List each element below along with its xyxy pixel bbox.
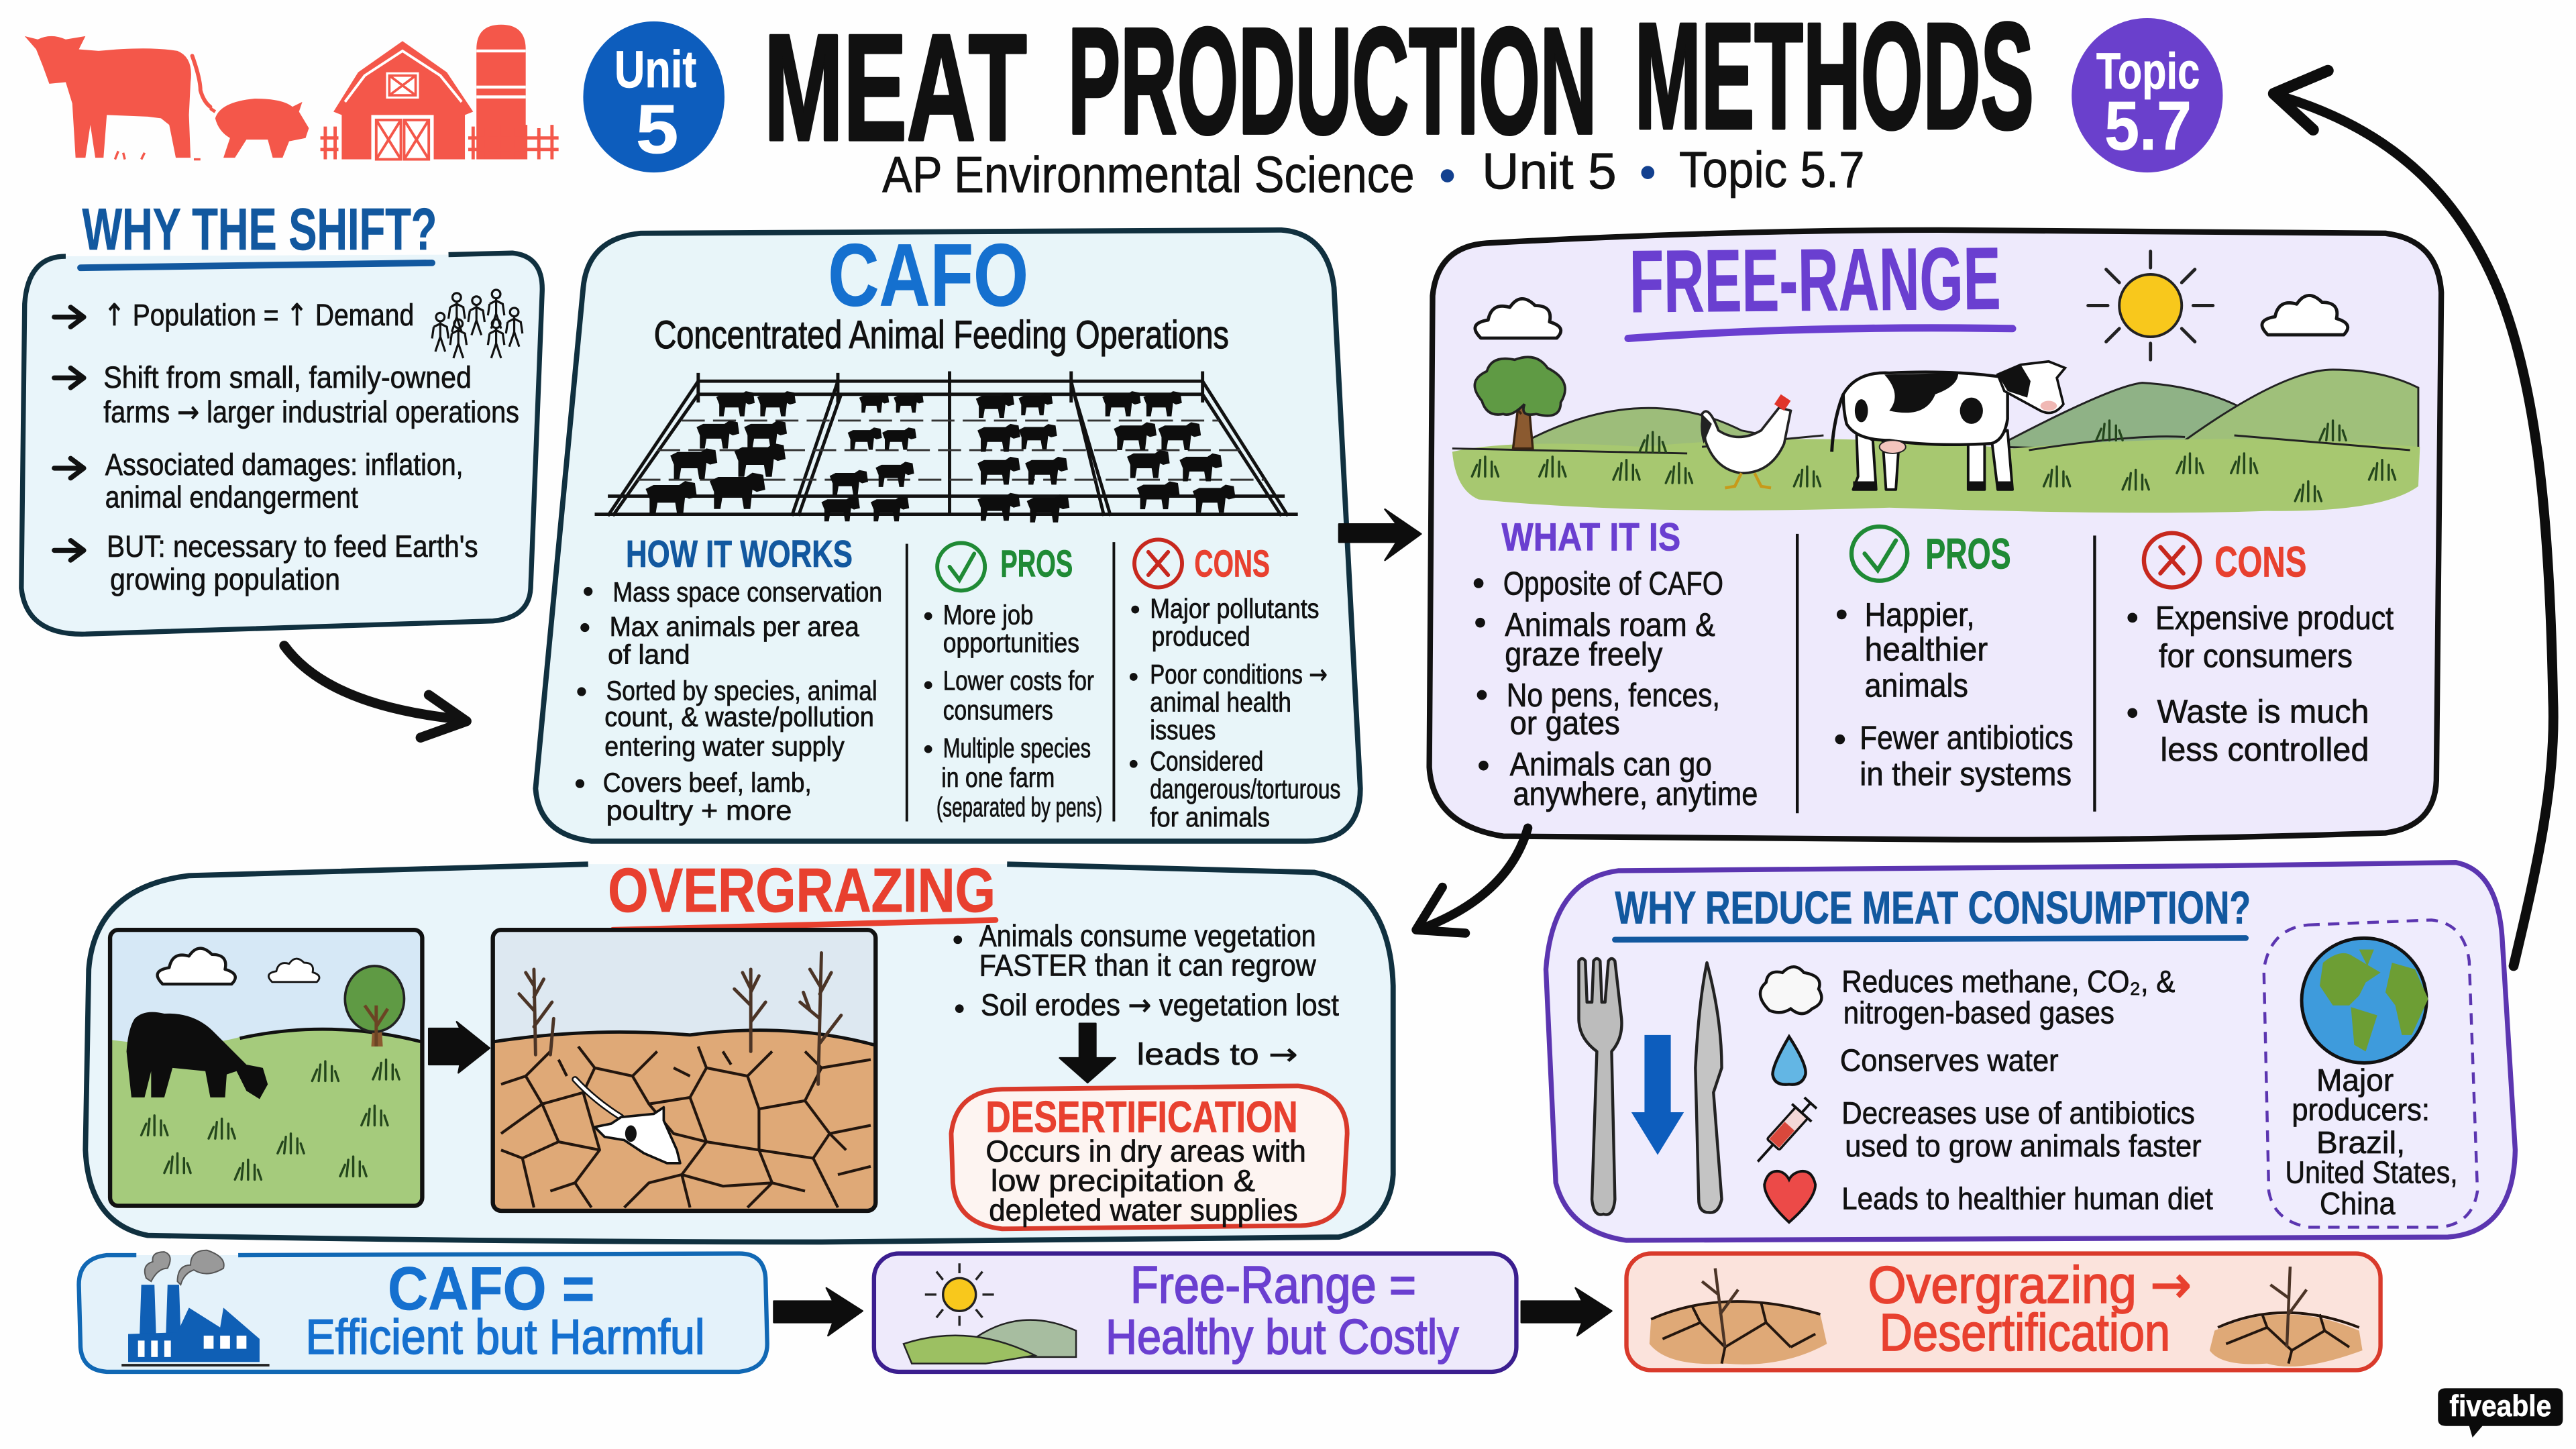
icon: silo (476, 25, 526, 160)
summary box: CAFO: CAFO = (388, 1255, 595, 1323)
icon: fork (1578, 959, 1621, 1215)
column: pros: More job (943, 600, 1033, 631)
heading underline (612, 920, 996, 930)
column: pros: Fewer antibiotics (1860, 720, 2074, 757)
icon: syringe (1748, 1094, 1820, 1171)
icon: dead trees (519, 953, 841, 1084)
icon: pig (210, 99, 309, 158)
column: what it is: No pens, fences, (1507, 678, 1720, 714)
topic badge (2072, 18, 2222, 172)
column: pros: opportunities (943, 627, 1079, 658)
unit badge: Unit (614, 40, 696, 99)
logo: fiveable: fiveable (2449, 1390, 2551, 1423)
column: cons: for animals (1150, 802, 1270, 833)
column: cons (1130, 539, 1340, 833)
column dividers (907, 542, 1114, 821)
subheading: Concentrated Animal Feeding Operations (654, 313, 1229, 357)
panel: overgrazing (85, 855, 1393, 1242)
icon: farm animals and barn (25, 25, 559, 160)
column: how it works: Mass space conservation (612, 576, 882, 607)
summary box: free-range: Healthy but Costly (1106, 1309, 1459, 1364)
summary box: overgrazing: Desertification (1880, 1303, 2170, 1362)
column: pros: healthier (1865, 631, 1988, 667)
icon: tree (1474, 357, 1565, 449)
icon: spotted cow (1832, 362, 2065, 490)
icon: sun (2088, 252, 2213, 360)
column: cons: Waste is much (2157, 694, 2369, 731)
column: how it works: Max animals per area (610, 611, 859, 642)
heading: WHY THE SHIFT? (82, 196, 437, 262)
arrow: summary 1 to 2 (773, 1288, 863, 1336)
icon: heart (1764, 1171, 1815, 1222)
callout: major producers: Brazil, (2316, 1125, 2405, 1160)
icon: water drop (1772, 1036, 1806, 1085)
overgrazing bullet text: Animals consume vegetation (979, 919, 1316, 953)
icon: cow (25, 36, 210, 160)
callout: desertification: depleted water supplies (989, 1193, 1298, 1228)
column: pros: PROS (1000, 543, 1073, 585)
icon: check (937, 543, 985, 590)
summary box: CAFO: Efficient but Harmful (306, 1309, 705, 1364)
heading: CAFO (828, 226, 1028, 325)
column: what it is: Animals can go (1510, 747, 1712, 783)
arrow bullets (54, 307, 84, 560)
illustration: feedlot pens (595, 371, 1298, 523)
column: cons: dangerous/torturous (1150, 773, 1340, 804)
icon: factory (121, 1250, 270, 1365)
benefits text: Leads to healthier human diet (1841, 1181, 2213, 1216)
subtitle: AP Environmental Science (882, 147, 1415, 204)
shift text: Associated damages: inflation, (105, 447, 464, 482)
callout: desertification: DESERTIFICATION (985, 1092, 1298, 1142)
column: pros: animals (1865, 667, 1968, 704)
icon: grazing black cow (127, 1012, 268, 1099)
unit badge (583, 21, 724, 172)
title: PRODUCTION (1068, 0, 1597, 165)
column: cons: less controlled (2160, 732, 2369, 768)
column: how it works (576, 533, 882, 826)
summary box: free-range (874, 1254, 1516, 1372)
arrow: shift to CAFO (284, 645, 467, 738)
arrow: loop back to title (2273, 70, 2553, 966)
icon: clouds (158, 949, 319, 984)
heading underline (1615, 938, 2246, 940)
heading: WHY REDUCE MEAT CONSUMPTION? (1615, 881, 2251, 933)
benefits text: Decreases use of antibiotics (1841, 1095, 2195, 1130)
column: pros (924, 543, 1102, 822)
icon: cross (2144, 533, 2200, 588)
title: MEAT (764, 3, 1027, 172)
column: how it works: of land (608, 639, 690, 669)
column: how it works: count, & waste/pollution (604, 701, 874, 732)
icon: tree (345, 966, 404, 1046)
column: pros: Lower costs for (943, 665, 1094, 696)
icon: chicken (1701, 394, 1790, 488)
column: how it works: Sorted by species, animal (606, 675, 877, 706)
callout: major producers: Major (2316, 1063, 2394, 1097)
arrow: pasture to desert (429, 1022, 490, 1073)
column: cons: CONS (2214, 539, 2306, 586)
column: cons: produced (1152, 621, 1250, 651)
arrow: CAFO to free-range (1339, 509, 1421, 560)
column: how it works: poultry + more (606, 795, 792, 826)
icon: cross (1134, 539, 1182, 588)
column: cons: CONS (1194, 543, 1270, 585)
callout: major producers: United States, (2286, 1155, 2458, 1189)
callout: desertification: Occurs in dry areas with (985, 1134, 1306, 1168)
callout: major producers: China (2320, 1186, 2396, 1221)
icon: globe (2302, 938, 2428, 1063)
subtitle: Unit 5 (1482, 144, 1617, 201)
shift text: growing population (110, 562, 340, 596)
summary box: overgrazing: Overgrazing → (1868, 1254, 2192, 1316)
icon: check (1851, 527, 1907, 581)
column: how it works: HOW IT WORKS (626, 533, 853, 575)
logo: fiveable (2438, 1388, 2563, 1438)
column: pros: in their systems (1860, 757, 2072, 793)
heading: OVERGRAZING (608, 855, 996, 925)
column: what it is: graze freely (1505, 637, 1663, 673)
panel: free-range (1430, 229, 2441, 840)
column: cons: animal health (1150, 686, 1291, 717)
icon: gas cloud (1760, 967, 1821, 1014)
column: pros: Happier, (1865, 597, 1975, 633)
column: cons: issues (1150, 714, 1216, 745)
icon: down arrow (1631, 1035, 1684, 1155)
summary box: CAFO (79, 1250, 767, 1372)
column: pros: PROS (1925, 530, 2011, 578)
arrow: leads to (1060, 1024, 1116, 1083)
panel: why reduce meat consumption (1546, 863, 2515, 1240)
column: pros: consumers (943, 695, 1053, 726)
column: what it is: WHAT IT IS (1501, 515, 1680, 559)
benefits text (1840, 964, 2213, 1216)
icon: barn (333, 41, 473, 160)
icon: dry soil right (2210, 1267, 2363, 1366)
column: what it is: Animals roam & (1505, 607, 1715, 643)
heading underline (80, 263, 432, 268)
shift text: animal endangerment (105, 480, 358, 515)
column: what it is (1474, 515, 1758, 812)
illustration: healthy pasture (110, 930, 422, 1206)
icon: dry soil left (1650, 1269, 1827, 1364)
column: cons: Considered (1150, 746, 1263, 777)
column: pros: (separated by pens) (936, 792, 1102, 822)
overgrazing bullet text (953, 919, 1339, 1022)
summary box: free-range: Free-Range = (1130, 1255, 1416, 1314)
icon: clouds (1475, 295, 2348, 338)
icon: skull (575, 1079, 680, 1163)
benefits text: used to grow animals faster (1845, 1128, 2202, 1163)
column: what it is: anywhere, anytime (1513, 776, 1758, 812)
illustration: desertified land (493, 930, 875, 1211)
column: cons: Major pollutants (1150, 593, 1320, 624)
column: how it works: Covers beef, lamb, (603, 767, 812, 798)
benefits text: Conserves water (1840, 1043, 2059, 1078)
column: cons: Poor conditions → (1150, 658, 1328, 690)
icon: fence (321, 125, 559, 160)
overgrazing bullet text: Soil erodes → vegetation lost (981, 987, 1339, 1022)
benefits text: Reduces methane, CO₂, & (1841, 964, 2175, 999)
icon: people (432, 290, 523, 358)
arrow: summary 2 to 3 (1521, 1288, 1611, 1336)
subtitle: Topic 5.7 (1679, 142, 1865, 199)
callout: desertification: low precipitation & (991, 1164, 1255, 1198)
overgrazing bullet text: FASTER than it can regrow (979, 949, 1316, 983)
column: pros: in one farm (941, 762, 1055, 793)
callout: major producers (2264, 920, 2477, 1227)
shift text: farms → larger industrial operations (103, 394, 519, 429)
benefits text: nitrogen-based gases (1843, 996, 2114, 1030)
heading underline (1628, 328, 2012, 338)
callout: major producers: producers: (2292, 1092, 2430, 1127)
summary box: overgrazing (1626, 1254, 2381, 1370)
shift text: ↑ Population = ↑ Demand (103, 297, 414, 333)
column: how it works: entering water supply (604, 731, 845, 762)
column dividers (1797, 534, 2094, 813)
shift text: BUT: necessary to feed Earth's (107, 529, 478, 564)
subtitle (882, 142, 1865, 204)
leads to label: leads to → (1137, 1036, 1298, 1072)
callout: desertification (951, 1086, 1347, 1229)
icon: knife (1695, 963, 1722, 1213)
unit badge: 5 (636, 91, 678, 168)
heading: FREE-RANGE (1629, 229, 2001, 331)
topic badge: 5.7 (2104, 87, 2192, 164)
column: what it is: or gates (1510, 706, 1620, 742)
column: pros (1835, 527, 2074, 793)
column: cons: Expensive product (2155, 600, 2394, 637)
column: cons (2127, 533, 2394, 768)
illustration: pasture (1452, 357, 2420, 513)
shift text (103, 297, 519, 596)
column: what it is: Opposite of CAFO (1503, 566, 1723, 602)
panel: why the shift (21, 196, 542, 634)
arrow: free-range to overgrazing (1416, 828, 1528, 933)
grass tufts (142, 1060, 399, 1179)
column: pros: Multiple species (943, 733, 1091, 763)
topic badge: Topic (2096, 43, 2200, 100)
icon: sun over hills (904, 1263, 1076, 1364)
column: cons: for consumers (2159, 638, 2353, 674)
panel: CAFO (535, 226, 1360, 841)
shift text: Shift from small, family-owned (103, 360, 472, 394)
